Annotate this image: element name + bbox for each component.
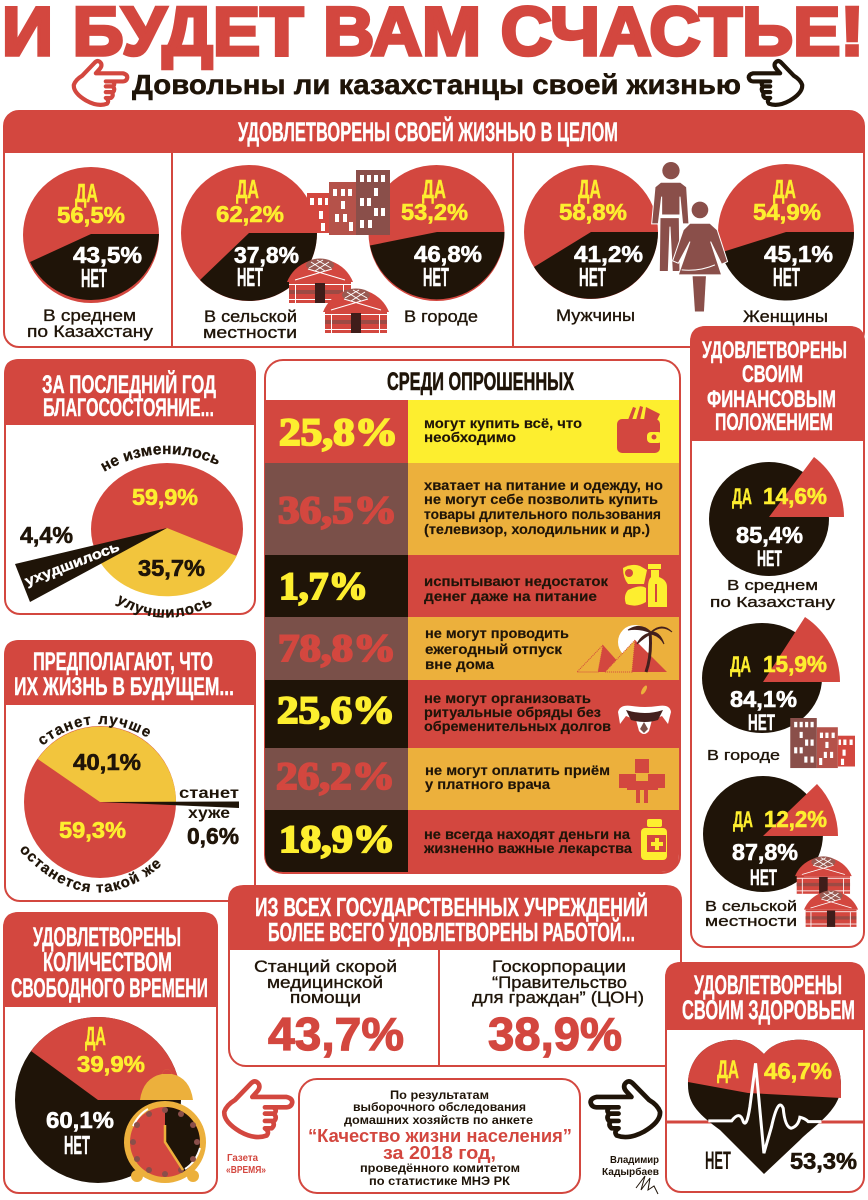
row 4: вне дома — [425, 656, 494, 672]
pie: men: НЕТ — [579, 262, 606, 292]
pie: average: НЕТ — [81, 263, 107, 293]
pie: finance average: 14,6% — [763, 483, 827, 509]
stat: government for citizens: для граждан” (ЦОН) — [472, 988, 644, 1007]
pie: finance average: по Казахстану — [710, 594, 836, 611]
icon: dish — [618, 685, 671, 734]
pie: rural: местности — [203, 323, 297, 342]
pie: average: 56,5% — [57, 202, 125, 228]
pie: city: 46,8% — [414, 241, 482, 267]
icon: alarm clock — [124, 1069, 206, 1183]
row 7: 18,9% — [279, 818, 395, 861]
pie: average: В среднем — [43, 306, 136, 325]
credit: newspaper: «ВРЕМЯ» — [226, 1165, 266, 1176]
heart chart: ДА — [717, 1056, 739, 1084]
stat: ambulance: медицинской — [267, 973, 383, 992]
pie chart: 0,6% — [187, 823, 239, 849]
row 3: испытывают недостаток — [424, 573, 609, 589]
heart chart: НЕТ — [705, 1147, 731, 1175]
stat: ambulance: помощи — [290, 988, 361, 1007]
row 2: (телевизор, холодильник и др.) — [424, 521, 650, 537]
pie: rural: В сельской — [204, 307, 297, 326]
panel: expectations for future — [4, 640, 256, 902]
heading — [702, 337, 847, 436]
pie chart: не изменилось — [100, 446, 219, 472]
pie chart: хуже — [188, 805, 230, 822]
heading — [682, 970, 855, 1025]
heading: ИХ ЖИЗНЬ В БУДУЩЕМ... — [14, 673, 234, 701]
pie: average: по Казахстану — [27, 322, 154, 341]
row 6: у платного врача — [425, 776, 550, 792]
row 7: не всегда находят деньги на — [424, 826, 630, 842]
row 4: не могут проводить — [425, 625, 569, 641]
heart chart: 53,3% — [790, 1148, 857, 1174]
row 1 — [265, 400, 679, 463]
pie chart: 60,1% — [46, 1107, 114, 1133]
pie: finance average: НЕТ — [757, 546, 782, 571]
row 2: не могут себе позволить купить — [424, 491, 658, 507]
pie: city — [307, 165, 504, 326]
pie: finance average — [709, 457, 844, 611]
icon: man and woman — [652, 162, 728, 312]
panel: satisfied with life overall — [4, 111, 864, 347]
row 5 — [265, 680, 679, 748]
credit: author — [591, 1081, 660, 1194]
row 5: не могут организовать — [424, 690, 591, 706]
subtitle text: Довольны ли казахстанцы своей жизнью — [132, 69, 741, 100]
row 7 — [265, 810, 679, 872]
icon: yurts — [795, 856, 858, 927]
pie: rural — [181, 165, 317, 342]
row 4: 78,8% — [278, 627, 396, 670]
heading: БЛАГОСОСТОЯНИЕ... — [43, 394, 214, 422]
pie: finance city: 84,1% — [730, 686, 797, 712]
source note: за 2018 год, — [383, 1143, 496, 1163]
pie: women — [718, 164, 854, 326]
pie: city: В городе — [404, 307, 478, 326]
pie: rural: ДА — [236, 174, 259, 204]
stat: ambulance: 43,7% — [268, 1008, 404, 1060]
panel: satisfied with free time — [3, 912, 218, 1193]
icon: food — [623, 564, 667, 607]
row 1: могут купить всё, что — [424, 415, 582, 431]
heading — [255, 892, 648, 947]
pie chart — [20, 716, 239, 893]
heading: УДОВЛЕТВОРЕНЫ СВОЕЙ ЖИЗНЬЮ В ЦЕЛОМ — [238, 116, 618, 147]
panel: among respondents — [265, 360, 680, 873]
row 6: не могут оплатить приём — [425, 762, 610, 778]
pie: women: НЕТ — [773, 262, 800, 292]
pie chart: станет лучше — [39, 716, 150, 744]
pie: average: ДА — [75, 178, 98, 208]
credit: author: Владимир — [610, 1155, 659, 1166]
source note: По результатам — [390, 1088, 489, 1102]
panel: financial satisfaction — [690, 326, 865, 947]
stat: ambulance — [254, 957, 404, 1060]
row 2 — [265, 463, 679, 555]
pie: average: 43,5% — [73, 242, 142, 268]
pie: city: НЕТ — [423, 262, 449, 292]
heading — [14, 648, 234, 701]
icon: pyramids and palm — [577, 625, 672, 672]
row 1: необходимо — [424, 429, 516, 445]
pie: finance city: ДА — [730, 652, 751, 677]
heading: ЗА ПОСЛЕДНИЙ ГОД — [42, 369, 216, 399]
stat: ambulance: Станций скорой — [254, 957, 397, 976]
pie chart — [15, 446, 243, 618]
pie: men: 58,8% — [559, 199, 627, 225]
pie: finance rural: 12,2% — [764, 806, 827, 832]
stat: government for citizens: “Правительство — [492, 973, 627, 992]
panel: satisfied with health — [665, 962, 865, 1192]
row 5: 25,6% — [277, 689, 395, 732]
pie: rural: НЕТ — [237, 262, 263, 292]
icon: wallet — [617, 406, 662, 453]
heading: СВОИМ — [742, 361, 803, 388]
heart chart: 46,7% — [764, 1058, 832, 1084]
heading: СВОБОДНОГО ВРЕМЕНИ — [11, 973, 208, 1003]
pie: average — [23, 167, 159, 341]
row 6: 26,2% — [276, 755, 395, 798]
row 5: ритуальные обряды без — [424, 704, 601, 720]
row 1: 25,8% — [279, 411, 398, 454]
stat: government for citizens: Госкорпорации — [492, 957, 626, 976]
pie: finance city: 15,9% — [763, 651, 827, 677]
pie: women: 54,9% — [753, 199, 821, 225]
pie: city: ДА — [422, 174, 446, 204]
pie chart: НЕТ — [64, 1130, 90, 1160]
pie: finance city: В городе — [707, 747, 780, 764]
icon: medicine bottle — [641, 819, 667, 860]
subtitle with pointing hands — [74, 61, 802, 105]
heading: УДОВЛЕТВОРЕНЫ — [33, 922, 181, 952]
pie chart: останется такой же — [20, 846, 161, 893]
source note: выборочного обследования — [353, 1100, 526, 1114]
pie chart — [15, 1017, 181, 1183]
pie chart: 59,3% — [59, 817, 126, 843]
source note: проведённого комитетом — [360, 1161, 520, 1175]
heading: КОЛИЧЕСТВОМ — [43, 947, 172, 977]
pie: finance rural: ДА — [733, 807, 753, 832]
pie: men — [524, 165, 658, 325]
pie chart: ухудшилось — [22, 538, 122, 589]
source note: по статистике МНЭ РК — [369, 1174, 511, 1188]
row 2: хватает на питание и одежду, но — [424, 477, 663, 493]
row 6 — [265, 748, 679, 810]
pie: women: 45,1% — [764, 241, 833, 267]
icon: black hand pointing left — [749, 61, 802, 105]
heading — [42, 369, 216, 422]
credit: newspaper: Газета — [227, 1153, 258, 1164]
source note — [299, 1079, 580, 1193]
icon: yurts — [287, 258, 389, 333]
pie: finance rural: местности — [705, 913, 797, 930]
pie: finance average: ДА — [732, 484, 752, 509]
pie: city: 53,2% — [401, 199, 468, 225]
pie: women: Женщины — [743, 307, 828, 326]
row 5: обременительных долгов — [424, 718, 611, 734]
icon: black hand — [591, 1081, 660, 1137]
row 7: жизненно важные лекарства — [423, 840, 632, 856]
pie chart: ДА — [85, 1021, 106, 1051]
pie chart: 35,7% — [138, 555, 205, 581]
row 4 — [265, 617, 679, 680]
pie chart: станет — [179, 785, 239, 802]
pie: men: 41,2% — [574, 241, 643, 267]
row 3 — [265, 555, 679, 617]
heading: БОЛЕЕ ВСЕГО УДОВЛЕТВОРЕНЫ РАБОТОЙ... — [268, 917, 635, 947]
pie: finance rural: НЕТ — [750, 865, 777, 890]
pie: finance average: 85,4% — [736, 522, 803, 548]
pie: men: Мужчины — [556, 306, 635, 325]
icon: red hand — [224, 1081, 292, 1137]
pie chart: 59,9% — [132, 484, 198, 510]
pie: rural: 62,2% — [216, 201, 284, 227]
icon: medical cross — [619, 759, 665, 803]
pie: finance city: НЕТ — [748, 710, 775, 735]
stat: government for citizens — [472, 957, 644, 1060]
pie: men: ДА — [578, 174, 601, 204]
credit: newspaper — [224, 1081, 292, 1176]
row 2: товары длительного пользования — [424, 506, 661, 522]
pie: finance city — [702, 617, 855, 768]
pie chart: улучшилось — [115, 595, 212, 618]
pie chart: 4,4% — [20, 522, 73, 548]
row 4: ежегодный отпуск — [425, 641, 563, 657]
row 3: денег даже на питание — [424, 588, 597, 604]
heading: ПРЕДПОЛАГАЮТ, ЧТО — [33, 648, 213, 676]
pie: finance rural: 87,8% — [732, 839, 798, 865]
heading: СРЕДИ ОПРОШЕННЫХ — [387, 368, 574, 396]
source note: домашних хозяйств по анкете — [344, 1113, 533, 1127]
panel: state institutions — [228, 885, 682, 1066]
stat: government for citizens: 38,9% — [488, 1008, 622, 1060]
pie: finance rural — [703, 776, 858, 930]
pie: rural: 37,8% — [234, 242, 299, 268]
icon: city buildings — [307, 170, 390, 235]
credit: author: Кадырбаев — [602, 1166, 659, 1178]
heading: ИЗ ВСЕХ ГОСУДАРСТВЕННЫХ УЧРЕЖДЕНИЙ — [255, 892, 648, 922]
pie: finance average: В среднем — [727, 577, 818, 594]
icon: red hand pointing right — [74, 61, 127, 105]
source note: “Качество жизни населения” — [308, 1126, 572, 1146]
pie: finance rural: В сельской — [705, 898, 797, 915]
panel: wealth over last year — [4, 359, 256, 618]
pie chart: 40,1% — [73, 749, 141, 775]
heading — [11, 922, 208, 1003]
icon: city — [790, 718, 855, 768]
pie: women: ДА — [773, 174, 796, 204]
row 2: 36,5% — [278, 489, 397, 532]
pie chart: 39,9% — [77, 1051, 145, 1077]
row 3: 1,7% — [279, 565, 368, 608]
heart chart — [688, 1040, 857, 1175]
